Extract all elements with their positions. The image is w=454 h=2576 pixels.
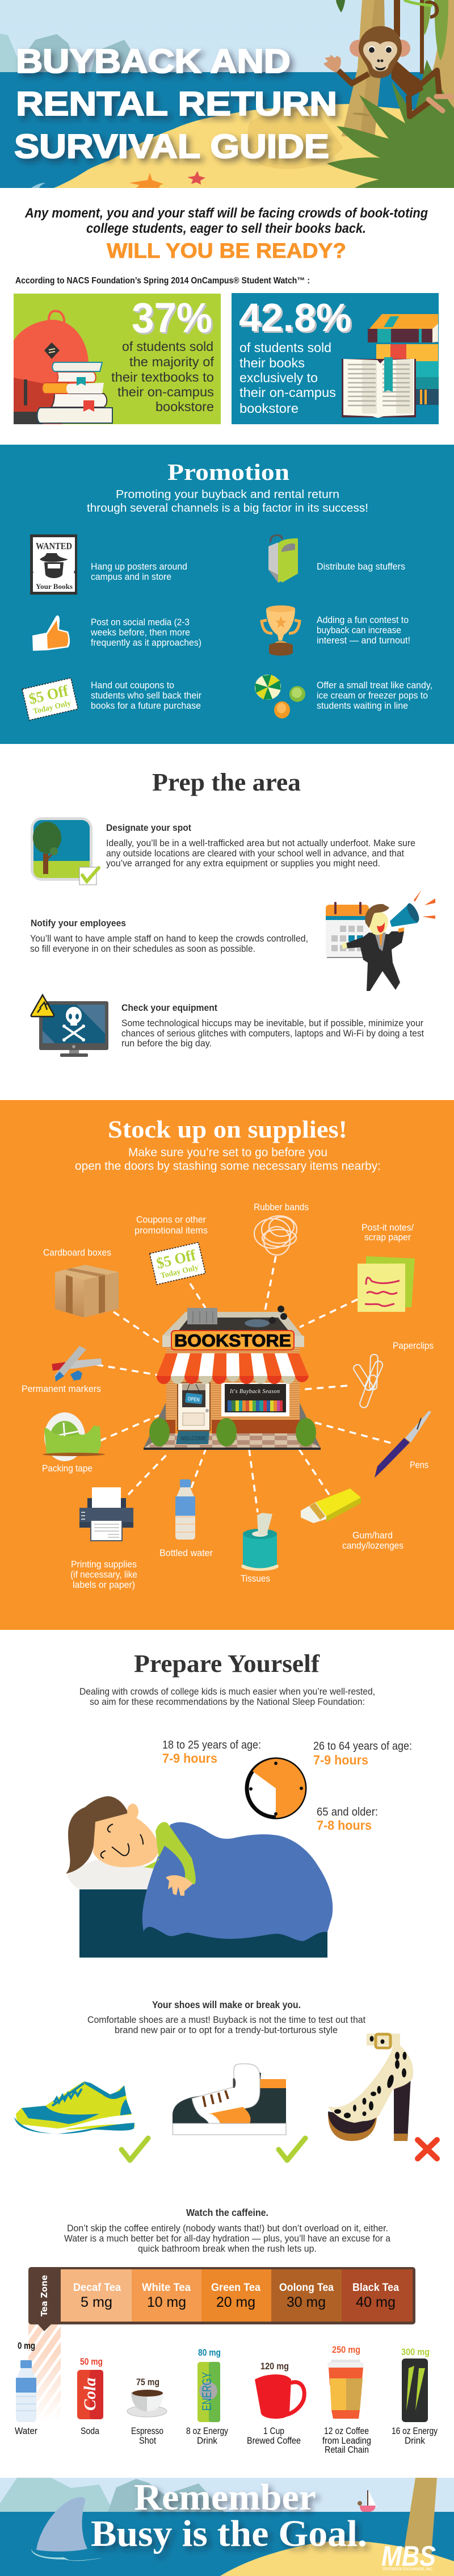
icon: trophy: [262, 605, 300, 655]
promo text: interest — and turnout!: [317, 635, 410, 646]
drink labels: Shot: [139, 2435, 156, 2446]
icon: coupon: Today Only: [32, 699, 72, 716]
label: cardboard boxes: Cardboard boxes: [43, 1247, 111, 1258]
heading: stock up: Stock up on supplies!: [108, 1116, 347, 1143]
label: post-it notes: scrap paper: [364, 1232, 411, 1243]
icon: coffee mug: [255, 2374, 304, 2419]
icon: bookstore building: It's Buyback Season: [229, 1389, 280, 1395]
label: printing supplies: Printing supplies: [71, 1559, 137, 1570]
stat caption: their textbooks to: [111, 370, 214, 384]
label: permanent markers: Permanent markers: [22, 1383, 101, 1394]
intro text: [24, 206, 428, 236]
promotion intro: through several channels is a big factor in its success!: [87, 502, 368, 515]
hair: [66, 1796, 128, 1874]
promo text: [317, 614, 410, 646]
black tea: 40 mg: [356, 2294, 396, 2310]
closing message: [91, 2477, 367, 2554]
icon: cardboard box: [55, 1265, 119, 1318]
supplies intro: Make sure you’re set to go before you: [128, 1146, 327, 1159]
icon: high heel: [328, 2034, 413, 2141]
caffeine amounts: 0 mg: [18, 2340, 35, 2351]
supplies intro: [75, 1146, 381, 1173]
stat: 65 and older: 7-8 hours: [317, 1818, 372, 1833]
promo text: buyback can increase: [317, 625, 401, 635]
label: printing supplies: [70, 1559, 137, 1590]
hand: [166, 1875, 193, 1896]
label: printing supplies: (if necessary, like: [70, 1569, 137, 1580]
shark fin: [31, 2497, 103, 2561]
decaf tea: 5 mg: [81, 2294, 112, 2310]
text: caffeine: Don’t skip the coffee entirely (nobody wants that!) but don’t overload on it, either.: [67, 2223, 388, 2234]
intro text: college students, eager to sell their books back.: [86, 221, 366, 236]
caffeine amounts: 80 mg: [198, 2347, 221, 2358]
promo text: ice cream or freezer pops to: [317, 690, 428, 701]
promo text: Post on social media (2-3: [91, 617, 190, 628]
text: shoes: Your shoes will make or break you.: [152, 1999, 301, 2010]
supplies intro: open the doors by stashing some necessary items nearby:: [75, 1160, 381, 1173]
icon: packing tape: [43, 1412, 105, 1461]
icon: coffee cup: [327, 2360, 364, 2419]
drink labels: Drink: [405, 2435, 425, 2446]
mountains: [0, 34, 139, 72]
icon: book stack: [37, 362, 112, 423]
promo text: Distribute bag stuffers: [317, 561, 405, 572]
title: RENTAL RETURN: [16, 85, 337, 123]
shrubs: [149, 1418, 170, 1446]
x mark: [418, 2140, 437, 2159]
drink labels: Retail Chain: [325, 2444, 369, 2455]
label: gum: candy/lozenges: [342, 1540, 403, 1551]
stat caption: their books: [239, 356, 305, 370]
icon: rubber bands: [254, 1216, 297, 1255]
heading: will you be ready: WILL YOU BE READY?: [107, 239, 346, 262]
promo text: students who sell back their: [91, 690, 201, 701]
black tea: Black Tea: [352, 2282, 399, 2294]
icon: shopping bag: [268, 534, 298, 583]
caffeine amounts: 75 mg: [136, 2377, 159, 2387]
stat: 65 and older: [317, 1806, 378, 1833]
stat caption: of students sold: [122, 339, 213, 354]
fin fragment: [31, 183, 45, 188]
icon: man with megaphone and calendar: [326, 890, 435, 991]
drink labels: [15, 2426, 438, 2455]
icon: sticky notes: [358, 1256, 415, 1312]
icon: bookstore building: WELCOME: [180, 1436, 206, 1442]
promo text: [317, 680, 432, 711]
promo text: weeks before, then more: [90, 627, 190, 638]
text: notify your employees: [30, 918, 308, 954]
promotion intro: Promoting your buyback and rental return: [116, 488, 339, 501]
sleep intro: Dealing with crowds of college kids is much easier when you’re well-rested,: [79, 1686, 375, 1697]
drink labels: 16 oz Energy: [392, 2426, 438, 2436]
icon: pen: [375, 1411, 431, 1478]
icon: large energy drink: [402, 2358, 428, 2422]
text: notify your employees: Notify your employees: [31, 918, 126, 929]
text: check your equipment: [121, 1003, 424, 1048]
text: designate your spot: you’ve arranged for any extra equipment or supplies you might need.: [106, 859, 380, 869]
white tea: [142, 2282, 191, 2310]
green tea: Green Tea: [211, 2282, 260, 2294]
stat caption: bookstore: [239, 401, 299, 416]
panel: prep the area: [30, 768, 435, 1057]
sign: [171, 1331, 294, 1350]
icon: printer: [79, 1487, 133, 1541]
stat: 18 to 25: 7-9 hours: [162, 1751, 217, 1766]
label: packing tape: Packing tape: [42, 1463, 93, 1474]
text: caffeine: [64, 2207, 390, 2254]
icon: paperclips: [352, 1354, 384, 1409]
icon: clock: [247, 1759, 305, 1818]
caffeine amounts: 120 mg: [260, 2361, 289, 2372]
logo: MBS: TEXTBOOK EXCHANGE, INC.: [382, 2567, 434, 2571]
white tea: White Tea: [142, 2282, 191, 2294]
icon: coupon: [150, 1243, 205, 1285]
icon: coupon: Today Only: [160, 1264, 199, 1281]
stat caption: their on-campus: [117, 384, 214, 399]
title: BUYBACK AND: [16, 43, 291, 80]
icon: water bottle: [16, 2360, 36, 2422]
drink labels: 8 oz Energy: [186, 2426, 228, 2436]
oolong tea: [279, 2282, 334, 2310]
sleep intro: [79, 1686, 375, 1707]
ear: [127, 1804, 138, 1820]
blanket: [142, 1822, 333, 1941]
panel: 37 percent: [14, 294, 221, 424]
icon: wanted poster: WANTED: [36, 541, 72, 551]
text: caffeine: Water is a much better bet for all-day hydration — plus, you’ll have an excuse for a: [64, 2233, 390, 2244]
green tea: 20 mg: [216, 2294, 255, 2310]
icon: bookstore building: OPEN: [187, 1396, 200, 1403]
promo text: Offer a small treat like candy,: [317, 680, 432, 691]
icon: monitor with skull: [31, 995, 108, 1057]
icon: wanted poster: Your Books: [36, 582, 73, 591]
oolong tea: 30 mg: [287, 2294, 326, 2310]
stat caption: of students sold: [239, 340, 331, 355]
stat: 65 and older: 65 and older:: [317, 1806, 378, 1818]
check mark: [121, 2138, 148, 2160]
promo text: Hang up posters around: [91, 561, 187, 572]
icon: thumbs up: [32, 616, 70, 651]
promo text: [91, 561, 187, 582]
stat: 37%: 37%: [132, 294, 212, 341]
promo text: students waiting in line: [317, 700, 408, 711]
icon: soda can: [77, 2370, 103, 2419]
starfish orange: [129, 173, 163, 188]
promo text: campus and in store: [91, 571, 171, 582]
heading: promotion: Promotion: [167, 459, 289, 485]
sleeve: [144, 1822, 196, 1884]
door: [178, 1383, 210, 1431]
promo text: Hand out coupons to: [91, 680, 174, 691]
drink labels: Water: [15, 2426, 37, 2436]
icon: books with open book: [342, 314, 439, 418]
white tea: 10 mg: [147, 2294, 186, 2310]
title: [14, 43, 337, 165]
panel: 42.8 percent: [232, 293, 439, 424]
drink labels: Soda: [81, 2426, 99, 2436]
label: coupons: [134, 1214, 208, 1236]
promo text: frequently as it approaches): [91, 637, 201, 648]
roof: [162, 1312, 302, 1336]
text: designate your spot: [106, 823, 415, 869]
text: notify your employees: so fill everyone in on their schedules as soon as possible.: [30, 944, 255, 954]
sea: [0, 2512, 454, 2576]
sleep intro: so aim for these recommendations by the National Sleep Foundation:: [90, 1696, 365, 1707]
icon: coupon: $5 Off: [27, 682, 70, 708]
bush: [327, 60, 454, 188]
drink labels: 12 oz Coffee: [324, 2426, 369, 2436]
oolong tea: Oolong Tea: [279, 2282, 334, 2294]
stat caption: [239, 340, 336, 416]
icon: wanted poster: [30, 534, 77, 595]
sand: [54, 104, 454, 188]
icon: bottled water: [175, 1479, 195, 1540]
panel: stock up on supplies: [0, 1100, 454, 1630]
text: check your equipment: run before the big day.: [121, 1038, 212, 1048]
text: designate your spot: Ideally, you’ll be in a well-trafficked area but not actually underfoot. Make sure: [106, 838, 415, 848]
text: designate your spot: Designate your spot: [106, 823, 191, 833]
icon: bookstore building: BOOKSTORE: [174, 1331, 291, 1350]
stat: 42.8%: 42.8%: [239, 295, 351, 340]
walls: [166, 1347, 300, 1427]
promotion intro: [87, 488, 368, 515]
icon: permanent markers: [52, 1346, 102, 1382]
stat caption: exclusively to: [239, 370, 318, 385]
leaves: [336, 0, 448, 61]
text: shoes: [87, 1999, 365, 2035]
source line: According to NACS Foundation’s Spring 2014 OnCampus® Student Watch™ :: [15, 276, 310, 286]
window: [221, 1383, 289, 1416]
icon: tissues: [241, 1513, 279, 1571]
mat: [176, 1431, 209, 1444]
pillow: [67, 1857, 156, 1889]
label: post-it notes: Post-it notes/: [361, 1222, 414, 1233]
text: check your equipment: Some technological hiccups may be inevitable, but if possible, minimize your: [121, 1018, 423, 1028]
label: gum: Gum/hard: [352, 1530, 393, 1541]
stat: 26 to 64: 7-9 hours: [313, 1753, 368, 1767]
monkey: [323, 0, 451, 116]
icon: candy: [255, 675, 305, 718]
promo text: [90, 617, 201, 648]
panel: prepare yourself: [14, 1650, 438, 2455]
label: post-it notes: [361, 1222, 414, 1243]
icon: energy drink can: [197, 2362, 220, 2422]
stat caption: the majority of: [129, 354, 215, 369]
chart: tea zone scale: [28, 2267, 415, 2331]
panel: promotion: [0, 445, 454, 744]
text: check your equipment: Check your equipment: [121, 1003, 217, 1013]
icon: gum pack: [301, 1488, 361, 1523]
panel: footer beach scene: [0, 2477, 454, 2576]
closing message: Busy is the Goal.: [91, 2513, 367, 2554]
stat: 26 to 64: [313, 1740, 412, 1767]
bed: [79, 1889, 327, 1958]
label: pens: Pens: [410, 1460, 428, 1470]
label: tissues: Tissues: [241, 1573, 270, 1584]
drink labels: Brewed Coffee: [247, 2435, 301, 2446]
closing message: Remember: [134, 2477, 316, 2518]
text: caffeine: quick bathroom break when the rush lets up.: [138, 2243, 317, 2254]
icon: coupon: [22, 678, 78, 720]
logo: MBS: MBS: [381, 2540, 436, 2572]
stat: 18 to 25: [162, 1739, 261, 1766]
tea zone label: Tea Zone: [39, 2275, 49, 2316]
caffeine amounts: [18, 2340, 430, 2387]
icon: coupon: $5 Off: [155, 1246, 198, 1272]
icon: sneaker: [14, 2081, 135, 2134]
text: check your equipment: chances of serious glitches with computers, laptops and Wi-Fi by doing a test: [121, 1028, 424, 1039]
heading: prepare yourself: Prepare Yourself: [134, 1650, 320, 1678]
icon: energy drink can: ENERGY: [200, 2372, 214, 2411]
tea zone stripe column: [28, 2323, 61, 2422]
promo text: books for a future purchase: [91, 700, 201, 711]
caffeine amounts: 50 mg: [80, 2356, 103, 2367]
illustration: sleeping person: [66, 1796, 333, 1958]
sand: [220, 2541, 454, 2576]
stat caption: [111, 339, 215, 414]
icon: high-top shoe: [173, 2064, 286, 2135]
palm trunk: [404, 2478, 437, 2556]
caffeine amounts: 250 mg: [332, 2344, 360, 2355]
sea: [0, 72, 454, 188]
drink labels: Espresso: [131, 2426, 163, 2436]
icon: soda can: Cola: [81, 2378, 99, 2411]
panel: header beach scene: [0, 0, 454, 188]
decaf tea: Decaf Tea: [73, 2282, 121, 2294]
mountains: [0, 2478, 224, 2512]
title: SURVIVAL GUIDE: [14, 128, 329, 165]
palm trunks: [342, 0, 454, 137]
icon: backpack: [14, 311, 89, 424]
text: shoes: Comfortable shoes are a must! Buyback is not the time to test out that: [87, 2014, 365, 2025]
promo text: [91, 680, 201, 711]
icon: tree location: [31, 817, 99, 885]
label: gum: [342, 1530, 403, 1551]
decaf tea: [73, 2282, 121, 2310]
stat caption: their on-campus: [239, 385, 336, 400]
caffeine amounts: 300 mg: [401, 2347, 430, 2357]
facial features: [101, 1824, 143, 1858]
heading: prep the area: Prep the area: [152, 768, 301, 796]
window books: [228, 1400, 283, 1411]
drink labels: 1 Cup: [263, 2426, 284, 2436]
black tea: [352, 2282, 399, 2310]
stat: 26 to 64: 26 to 64 years of age:: [313, 1740, 412, 1753]
drink labels: Drink: [197, 2435, 217, 2446]
label: coupons: promotional items: [134, 1225, 208, 1236]
floor: [144, 1433, 321, 1448]
dashed connectors: [96, 1256, 396, 1512]
text: caffeine: Watch the caffeine.: [186, 2207, 268, 2218]
promo text: Adding a fun contest to: [317, 614, 409, 625]
starfish red: [187, 171, 205, 185]
label: bottled water: Bottled water: [159, 1548, 213, 1558]
drink labels: from Leading: [322, 2435, 371, 2446]
sailboat: [358, 2490, 377, 2512]
green tea: [211, 2282, 260, 2310]
stat caption: bookstore: [155, 399, 214, 414]
stat: 18 to 25: 18 to 25 years of age:: [162, 1739, 261, 1751]
text: designate your spot: any outside locations are cleared with your school well in advance, and that: [106, 848, 404, 859]
awning: [157, 1353, 309, 1384]
face: [93, 1813, 159, 1867]
text: notify your employees: You’ll want to have ample staff on hand to keep the crowds controlled,: [30, 934, 308, 944]
label: printing supplies: labels or paper): [73, 1579, 135, 1590]
icon: bookstore building: [144, 1306, 321, 1450]
label: paperclips: Paperclips: [393, 1340, 434, 1351]
check mark: [279, 2138, 305, 2160]
icon: espresso cup: [127, 2390, 167, 2417]
text: shoes: brand new pair or to opt for a trendy-but-torturous style: [115, 2025, 338, 2035]
label: coupons: Coupons or other: [136, 1214, 206, 1225]
label: rubber bands: Rubber bands: [254, 1202, 309, 1212]
